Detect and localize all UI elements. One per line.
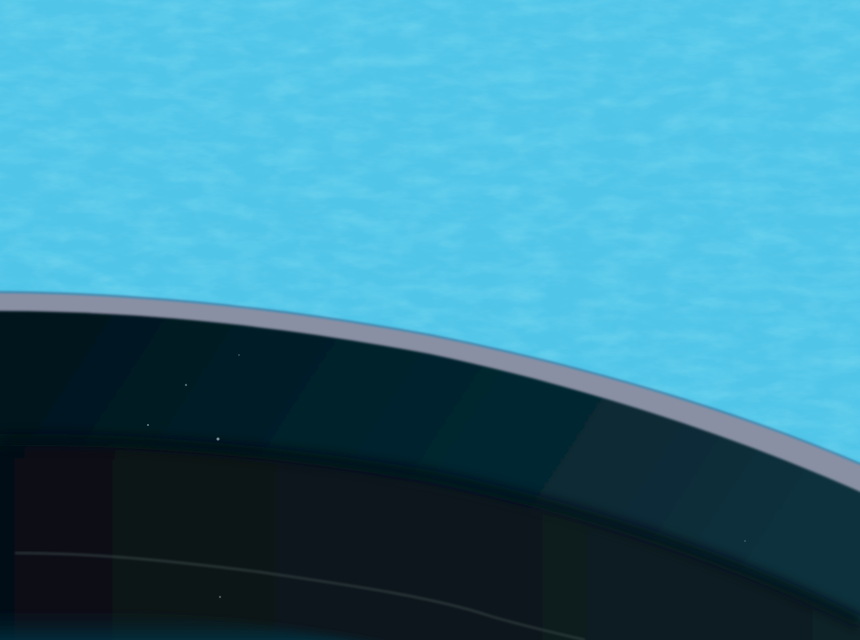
thin groove line (15, 553, 585, 640)
rim top outline (0, 292, 860, 466)
dust specks (147, 354, 746, 598)
rim: grey highlighted edge (0, 292, 860, 640)
bottom teal glow (0, 610, 400, 640)
upper band: dark teal surface (0, 311, 860, 640)
object: dark curved body (0, 292, 860, 640)
shadow along band junction (0, 440, 860, 622)
lower band: near-black surface (0, 445, 860, 640)
